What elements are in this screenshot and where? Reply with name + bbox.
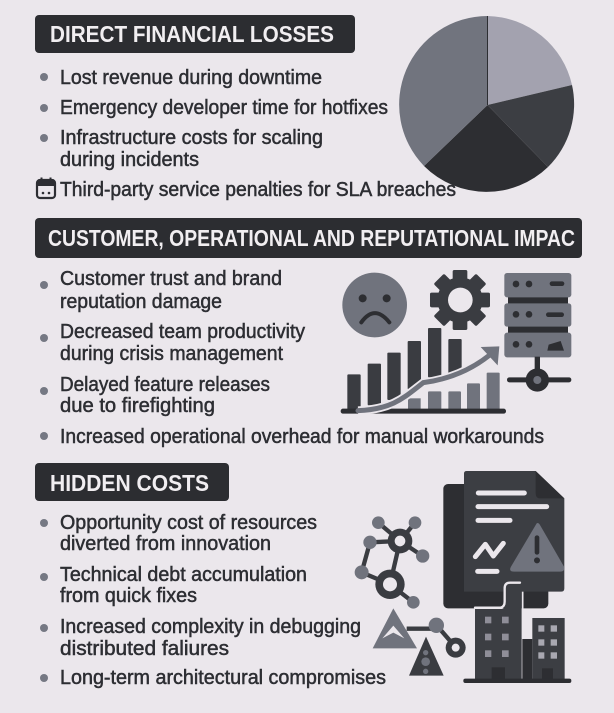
bullet list: direct losses: Infrastructure costs for scaling (60, 127, 323, 149)
bullet list: customer impact: during crisis management (60, 343, 283, 365)
heading: direct financial losses: DIRECT FINANCIAL LOSSES (50, 21, 334, 47)
icon: calendar (37, 178, 55, 198)
bullet list: hidden costs: Opportunity cost of resources (60, 512, 317, 534)
heading: hidden costs (35, 463, 229, 501)
bullet list: hidden costs: Long-term architectural compromises (60, 667, 386, 689)
bullet list: customer impact: reputation damage (60, 291, 222, 313)
heading: direct financial losses (35, 15, 355, 53)
icon: warning scale (373, 608, 466, 676)
icon: server rack (504, 273, 571, 392)
panel: customer, operational and reputational impact (35, 218, 582, 448)
bullet list: hidden costs: Increased complexity in debugging (60, 616, 361, 638)
panel: hidden costs (35, 463, 571, 689)
bullet list: direct losses: Third-party service penalties for SLA breaches (60, 179, 456, 201)
bar chart with trend arrow (341, 328, 506, 414)
bullet list: customer impact: Delayed feature releases (60, 374, 270, 396)
hidden costs illustration (355, 471, 571, 683)
icon: office buildings (463, 582, 571, 683)
bullet list: customer impact: Customer trust and brand (60, 268, 282, 290)
icon: network graph (355, 516, 429, 609)
bullet list: hidden costs: from quick fixes (60, 585, 197, 607)
bullet list: direct losses: Lost revenue during downtime (60, 67, 322, 89)
icon: gear (430, 270, 490, 330)
bullet list: direct losses (40, 67, 456, 201)
icon: sad face (342, 273, 407, 337)
pie chart (399, 16, 574, 192)
bullet list: hidden costs (40, 512, 386, 689)
bullet list: hidden costs: diverted from innovation (60, 533, 271, 555)
bullet list: customer impact: due to firefighting (60, 395, 215, 417)
bullet list: hidden costs: Technical debt accumulation (60, 564, 307, 586)
panel: direct financial losses (35, 15, 574, 201)
bullet list: hidden costs: distributed faliures (60, 638, 229, 660)
bullet list: direct losses: during incidents (60, 149, 199, 171)
heading: customer impact (35, 218, 582, 258)
impact illustration (341, 270, 571, 414)
bullet list: direct losses: Emergency developer time for hotfixes (60, 97, 388, 119)
heading: hidden costs: HIDDEN COSTS (50, 470, 209, 496)
bullet list: customer impact (40, 268, 544, 448)
bullet list: customer impact: Increased operational overhead for manual workarounds (60, 426, 544, 448)
icon: document with warning (443, 471, 564, 608)
bullet list: customer impact: Decreased team productivity (60, 321, 305, 343)
